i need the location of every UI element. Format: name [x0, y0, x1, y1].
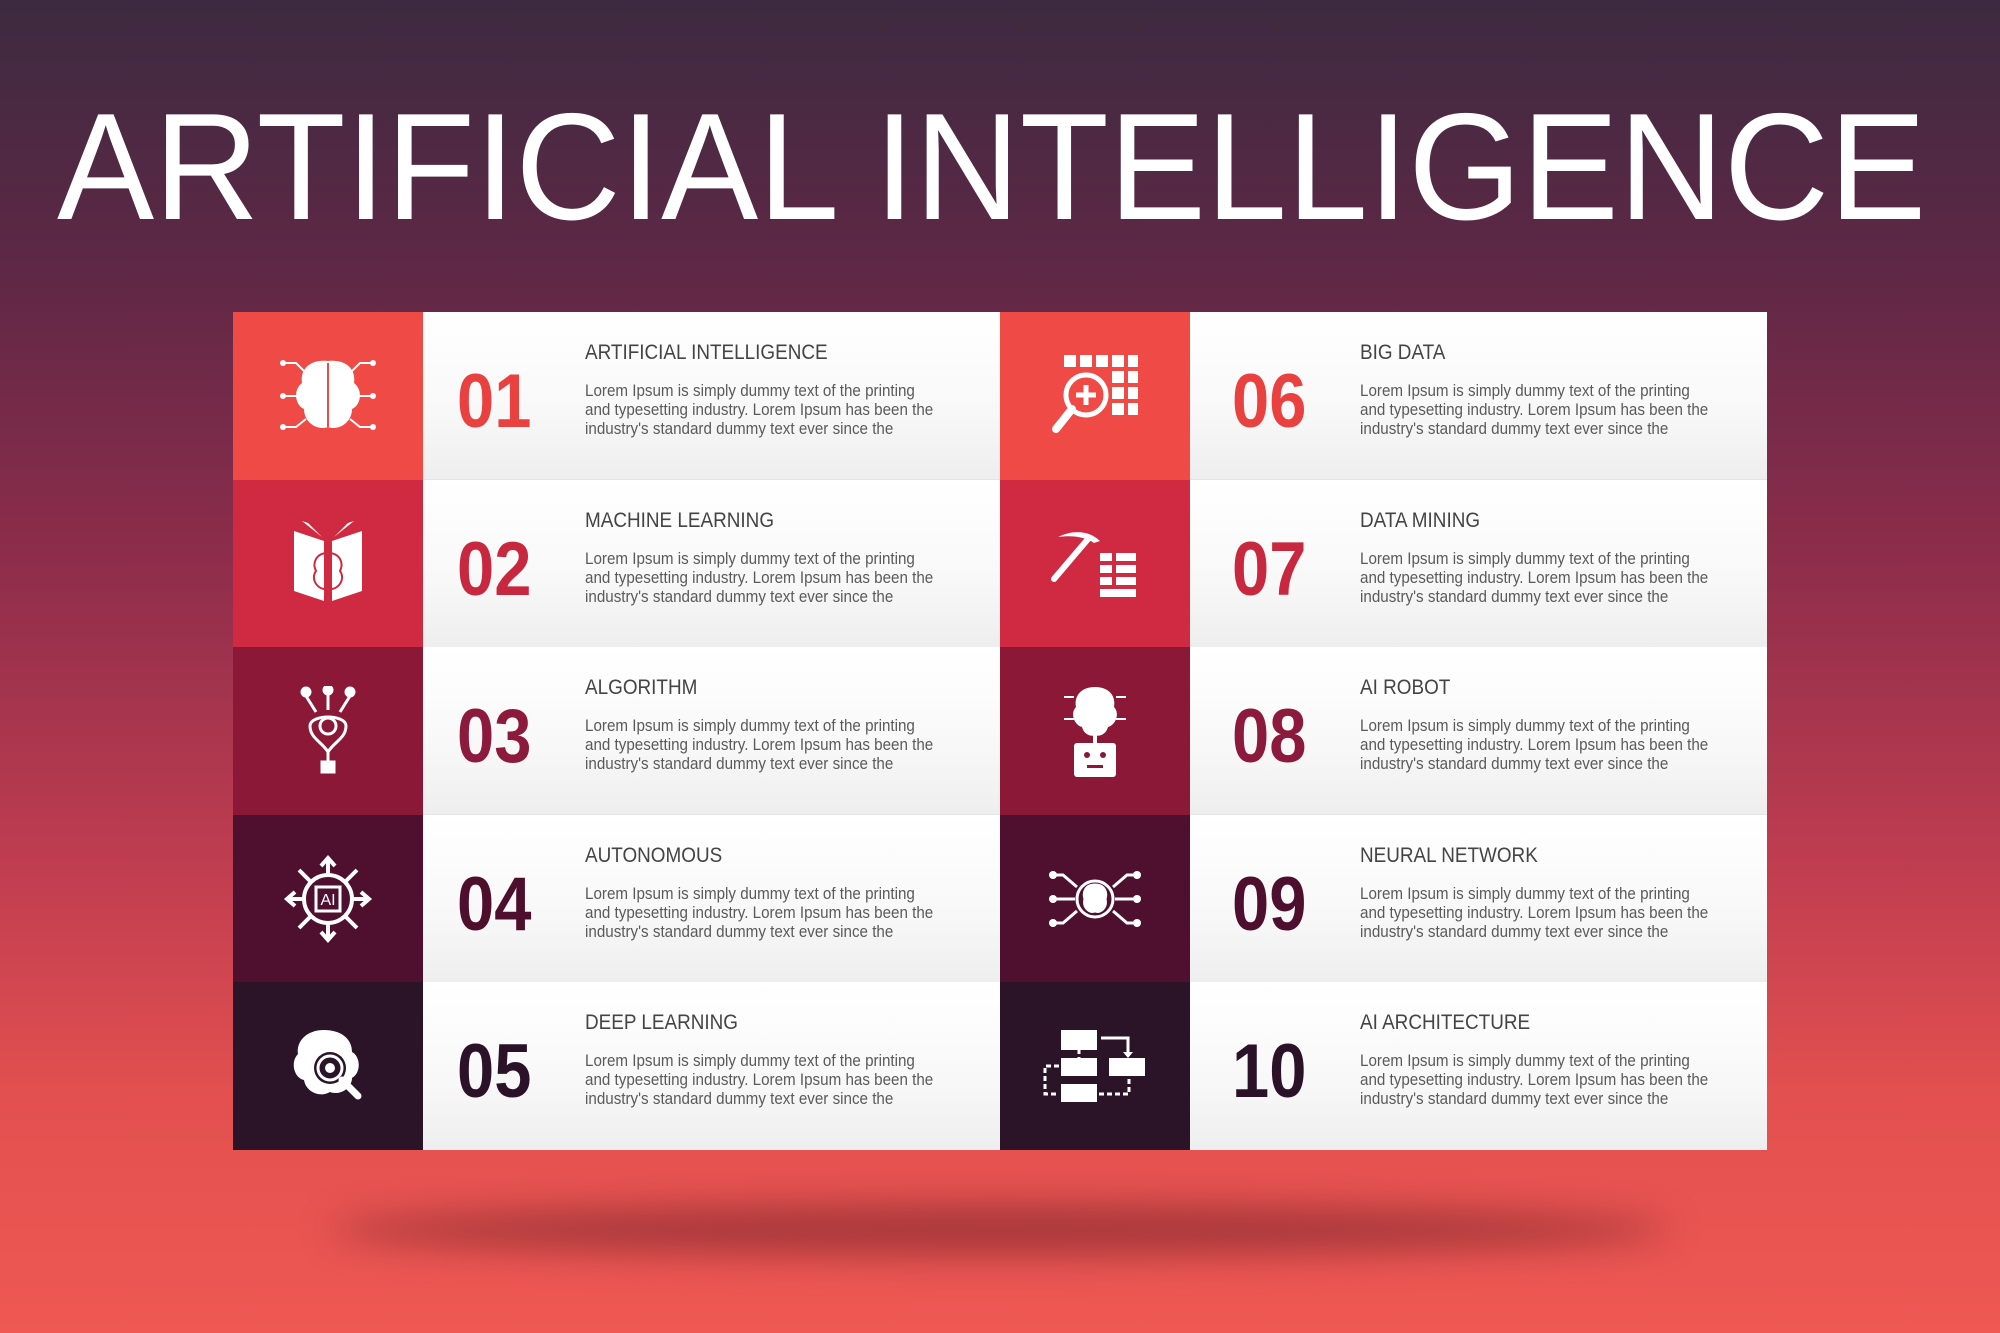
panel 03 [423, 647, 1000, 815]
icon: AI architecture flowchart [1000, 982, 1190, 1150]
panel 06: 06 [1232, 359, 1306, 444]
panel 03: industry's standard dummy text ever since the [585, 755, 893, 773]
row 01 [233, 312, 1000, 480]
panel 08: and typesetting industry. Lorem Ipsum has been the [1360, 736, 1708, 754]
shadow under table [330, 1205, 1670, 1255]
panel 09: Lorem Ipsum is simply dummy text of the printing [1360, 885, 1690, 903]
panel 01: 01 [457, 359, 531, 444]
panel 10: and typesetting industry. Lorem Ipsum has been the [1360, 1071, 1708, 1089]
icon: autonomous AI chip [233, 815, 423, 983]
row 08 [1000, 647, 1767, 815]
panel 04: Lorem Ipsum is simply dummy text of the printing [585, 885, 915, 903]
icon: algorithm gear [233, 647, 423, 815]
panel 10: AI ARCHITECTURE [1360, 1011, 1530, 1034]
panel 04: AUTONOMOUS [585, 844, 722, 867]
panel 02 [423, 480, 1000, 648]
row 10 [1000, 982, 1767, 1150]
panel 02: MACHINE LEARNING [585, 509, 774, 532]
panel 09: 09 [1232, 862, 1306, 947]
panel 08: Lorem Ipsum is simply dummy text of the printing [1360, 717, 1690, 735]
panel 06: Lorem Ipsum is simply dummy text of the printing [1360, 382, 1690, 400]
panel 03: and typesetting industry. Lorem Ipsum has been the [585, 736, 933, 754]
panel 05: DEEP LEARNING [585, 1011, 738, 1034]
panel 05: 05 [457, 1029, 531, 1114]
row 07 [1000, 480, 1767, 647]
icon: autonomous AI chip: AI [320, 892, 336, 909]
row 03 [233, 647, 1000, 815]
panel 07: 07 [1232, 527, 1306, 612]
panel 09: NEURAL NETWORK [1360, 844, 1538, 867]
panel 09 [1190, 815, 1767, 983]
panel 09: industry's standard dummy text ever since the [1360, 923, 1668, 941]
panel 08: 08 [1232, 694, 1306, 779]
panel 03: ALGORITHM [585, 676, 697, 699]
panel 02: 02 [457, 527, 531, 612]
panel 10: industry's standard dummy text ever since the [1360, 1090, 1668, 1108]
panel 07 [1190, 480, 1767, 648]
icon: big data grid magnifier [1000, 312, 1190, 480]
panel 01: Lorem Ipsum is simply dummy text of the printing [585, 382, 915, 400]
icon: data mining pickaxe [1000, 480, 1190, 648]
panel 08: industry's standard dummy text ever since the [1360, 755, 1668, 773]
panel 04: industry's standard dummy text ever since the [585, 923, 893, 941]
panel 09: and typesetting industry. Lorem Ipsum has been the [1360, 904, 1708, 922]
panel 05: and typesetting industry. Lorem Ipsum has been the [585, 1071, 933, 1089]
panel 05 [423, 982, 1000, 1150]
panel 06: industry's standard dummy text ever since the [1360, 420, 1668, 438]
panel 03: Lorem Ipsum is simply dummy text of the printing [585, 717, 915, 735]
panel 02: and typesetting industry. Lorem Ipsum has been the [585, 569, 933, 587]
panel 08 [1190, 647, 1767, 815]
row 05 [233, 982, 1000, 1150]
panel 07: Lorem Ipsum is simply dummy text of the printing [1360, 550, 1690, 568]
title: ARTIFICIAL INTELLIGENCE [57, 82, 1926, 252]
panel 05: industry's standard dummy text ever since the [585, 1090, 893, 1108]
panel 01: ARTIFICIAL INTELLIGENCE [585, 341, 828, 364]
row 02 [233, 480, 1000, 647]
panel 03: 03 [457, 694, 531, 779]
panel 07: DATA MINING [1360, 509, 1480, 532]
panel 02: industry's standard dummy text ever since the [585, 588, 893, 606]
panel 01: industry's standard dummy text ever since the [585, 420, 893, 438]
icon: AI robot [1000, 647, 1190, 815]
icon: brain circuit [233, 312, 423, 480]
panel 10: 10 [1232, 1029, 1306, 1114]
panel 10: Lorem Ipsum is simply dummy text of the printing [1360, 1052, 1690, 1070]
panel 06: BIG DATA [1360, 341, 1445, 364]
icon: deep learning brain magnifier [233, 982, 423, 1150]
icon: book brain [233, 480, 423, 648]
panel 07: industry's standard dummy text ever since the [1360, 588, 1668, 606]
icon: neural network [1000, 815, 1190, 983]
panel 01: and typesetting industry. Lorem Ipsum has been the [585, 401, 933, 419]
panel 06: and typesetting industry. Lorem Ipsum has been the [1360, 401, 1708, 419]
panel 04 [423, 815, 1000, 983]
panel 04: and typesetting industry. Lorem Ipsum has been the [585, 904, 933, 922]
panel 05: Lorem Ipsum is simply dummy text of the printing [585, 1052, 915, 1070]
panel 08: AI ROBOT [1360, 676, 1450, 699]
row 06 [1000, 312, 1767, 480]
row 04 [233, 815, 1000, 982]
panel 07: and typesetting industry. Lorem Ipsum has been the [1360, 569, 1708, 587]
row 09 [1000, 815, 1767, 982]
panel 10 [1190, 982, 1767, 1150]
panel 04: 04 [457, 862, 531, 947]
panel 02: Lorem Ipsum is simply dummy text of the printing [585, 550, 915, 568]
panel 01 [423, 312, 1000, 480]
panel 06 [1190, 312, 1767, 480]
